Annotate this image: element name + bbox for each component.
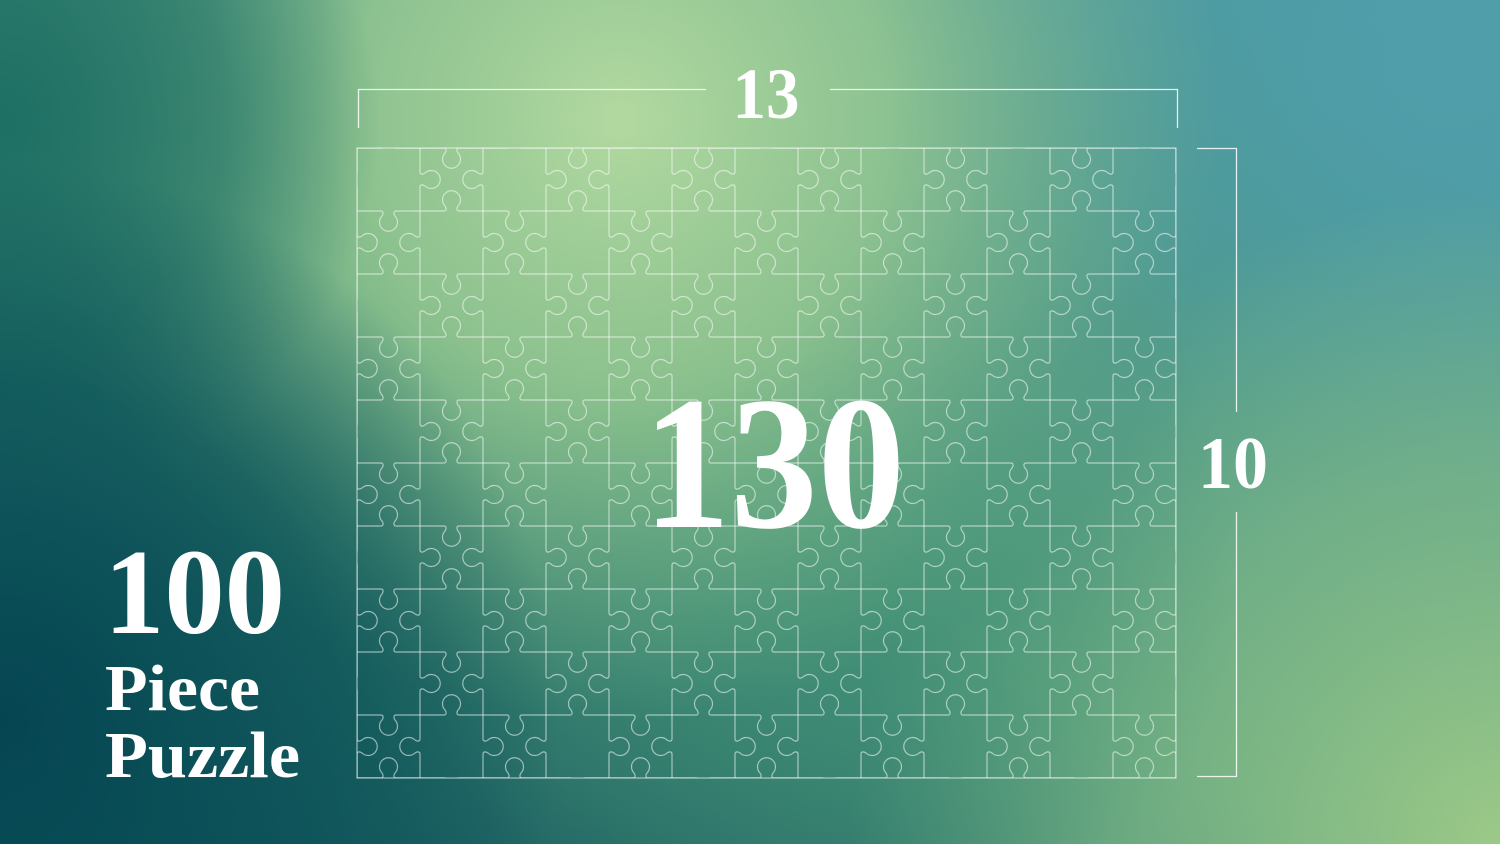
top label: 13: 13 [732, 54, 800, 134]
puzzle grid [357, 148, 1176, 778]
title block: 100 Piece Puzzle: Piece [105, 652, 260, 725]
center total: 130: 130 [643, 359, 905, 569]
right dimension bracket [1197, 148, 1236, 776]
right label: 10: 10 [1198, 423, 1268, 505]
title block: 100 Piece Puzzle: 100 [104, 525, 285, 660]
top dimension bracket [358, 90, 1178, 128]
title block: 100 Piece Puzzle: Puzzle [105, 719, 300, 792]
title block: 100 Piece Puzzle [104, 525, 300, 792]
